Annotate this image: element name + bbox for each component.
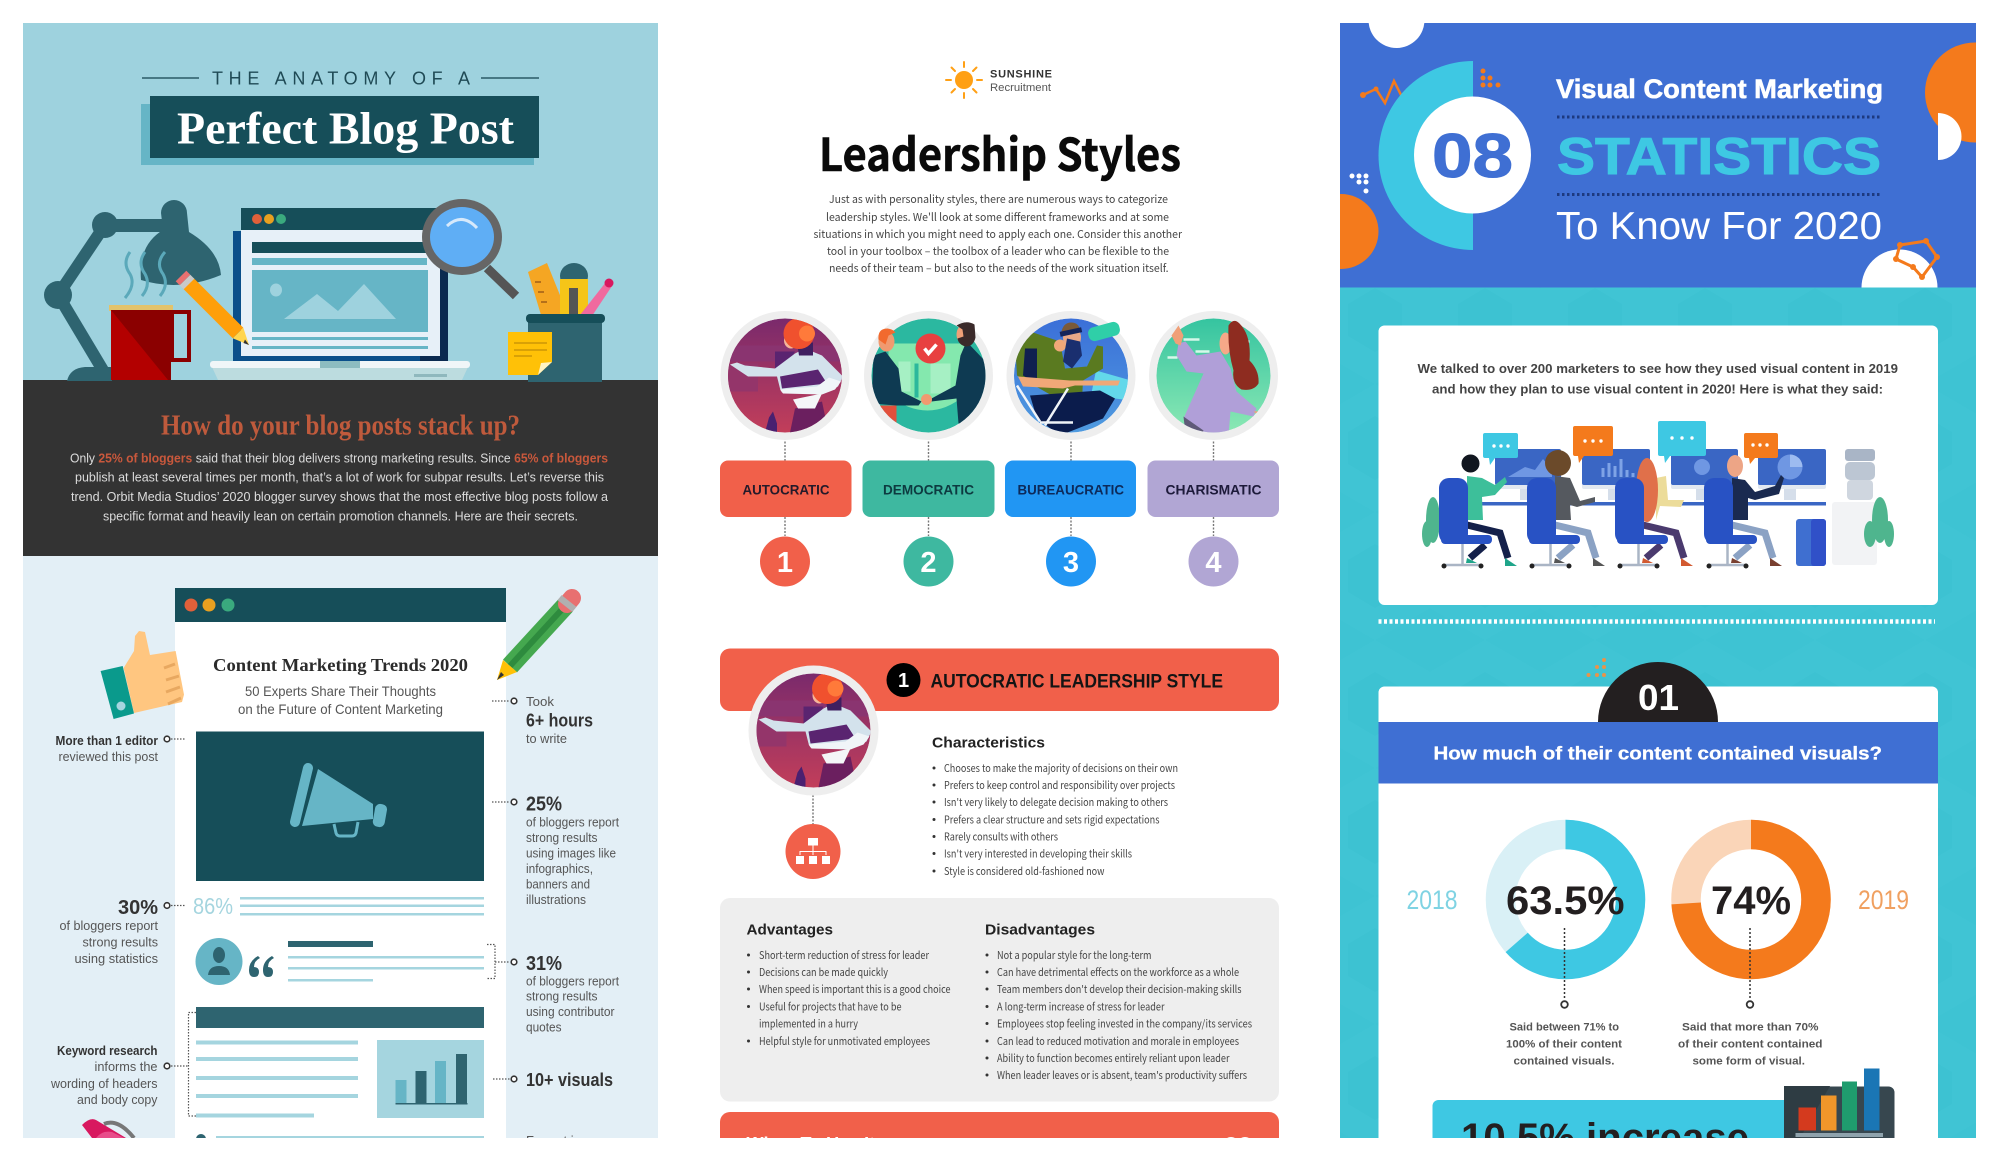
text block: advantages: implemented in a hurry [759, 1016, 858, 1032]
caption: 2019: of their content contained [1678, 1038, 1822, 1050]
badge: number 08 [1378, 61, 1531, 250]
number badge 1: 1 [777, 547, 793, 579]
caption: 2018: contained visuals. [1514, 1056, 1614, 1068]
text block: characteristics: Style is considered old-fashioned now [944, 864, 1105, 879]
callout: more than 1 editor: reviewed this post [58, 749, 158, 764]
icon: bar chart on screen [1784, 1068, 1894, 1156]
text block: disadvantages: Not a popular style for the long-term [997, 948, 1152, 963]
caption: 2018: Said between 71% to [1510, 1022, 1619, 1034]
style column 1: autocratic [720, 311, 852, 586]
callout: 31% quotes: of bloggers report [526, 974, 619, 988]
callout: keyword research: informs the [94, 1059, 158, 1074]
water cooler [1832, 449, 1877, 565]
text block: disadvantages: Employees stop feeling invested in the company/its services [997, 1016, 1252, 1032]
style column 2: democratic [862, 311, 994, 586]
icon: magnifying glass [422, 199, 516, 296]
panel: Leadership Styles infographic [720, 61, 1279, 1138]
style column 3: bureaucratic [1005, 311, 1136, 586]
plant right [1864, 497, 1894, 547]
illustration: seated man [1006, 311, 1136, 440]
section header: Autocratic Leadership Style [720, 648, 1279, 711]
document title: Content Marketing Trends 2020 [213, 655, 468, 675]
label: democratic [862, 460, 994, 517]
text block: disadvantages: Ability to function becomes entirely reliant upon leader [997, 1051, 1230, 1066]
donut chart: 2019 74%: 74% [1711, 879, 1791, 923]
intro paragraph [70, 450, 609, 524]
illustration: autocratic leader [720, 311, 850, 440]
panel: Visual Content Marketing infographic [1304, 0, 1999, 1162]
intro paragraph: leadership styles. We'll look at some different frameworks and at some [826, 209, 1169, 225]
panel: advantages and disadvantages [720, 898, 1279, 1102]
caption: 2018: 100% of their content [1506, 1038, 1622, 1050]
callout: 30% statistics: 30% [118, 897, 158, 919]
bar chart visual [377, 1040, 484, 1118]
section header: Autocratic Leadership Style: 1 [898, 670, 909, 692]
illustration: office team at computers [1422, 421, 1894, 568]
desk [1482, 502, 1826, 506]
next section stub [196, 1134, 484, 1138]
icon: orange pencil [181, 276, 249, 345]
title banner: Perfect Blog Post: Perfect Blog Post [177, 102, 515, 154]
text block: disadvantages [985, 922, 1252, 1083]
intro text: We talked to over 200 marketers to see how they used visual content in 2019 [1418, 362, 1898, 376]
question band: How much of their content contained visuals? [1434, 742, 1882, 764]
intro text [1418, 362, 1898, 396]
callout: 6+ hours: to write [526, 731, 567, 746]
document subtitle: on the Future of Content Marketing [238, 701, 443, 717]
donut chart: 2019 74% [1686, 834, 1909, 964]
title: To Know For 2020: To Know For 2020 [1556, 205, 1882, 248]
person 2 [1527, 450, 1605, 568]
text block: characteristics: Prefers to keep control and responsibility over projects [944, 778, 1175, 793]
text block: advantages: Short-term reduction of stress for leader [759, 948, 930, 963]
callout: 25% images [492, 794, 619, 907]
section header: Autocratic Leadership Style: AUTOCRATIC LEADERSHIP STYLE [930, 672, 1223, 692]
label: autocratic: AUTOCRATIC [742, 482, 830, 498]
intro paragraph: Just as with personality styles, there are numerous ways to categorize [829, 191, 1168, 207]
text block: disadvantages: A long-term increase of stress for leader [997, 1000, 1165, 1014]
text block: advantages [746, 922, 951, 1049]
hero image with megaphone icon [196, 732, 484, 881]
monitors [1495, 449, 1826, 500]
person 4 [1704, 455, 1784, 568]
callout: 10.5% increase [1432, 1100, 1832, 1160]
panel: intro card [1378, 326, 1938, 605]
document subtitle: 50 Experts Share Their Thoughts [245, 683, 436, 699]
icon: pink magnet stub [82, 1119, 134, 1138]
icon: pen cup [508, 263, 614, 382]
text block: characteristics: Rarely consults with others [944, 830, 1058, 844]
callout: more than 1 editor: More than 1 editor [56, 733, 158, 748]
title: The Anatomy of a: THE ANATOMY OF A [212, 68, 470, 88]
icon: green pencil [497, 598, 572, 680]
icon: red mug [109, 305, 189, 380]
caption: 2019: some form of visual. [1692, 1056, 1805, 1068]
text block: advantages: Decisions can be made quickly [759, 965, 888, 980]
icon: laptop with blog window [210, 208, 470, 380]
label: charismatic: CHARISMATIC [1166, 482, 1262, 498]
callout: 31% quotes: quotes [526, 1020, 562, 1034]
intro paragraph: situations in which you might need to apply each one. Consider this another [814, 226, 1183, 242]
text block: characteristics: Isn't very likely to delegate decision making to others [944, 795, 1168, 810]
text block: disadvantages: Can have detrimental effects on the workforce as a whole [997, 965, 1239, 980]
callout: 25% images: using images like [526, 846, 616, 860]
style column 4: charismatic [1148, 311, 1279, 586]
callout: 25% images: illustrations [526, 893, 586, 907]
callout: 25% images: 25% [526, 794, 562, 816]
text block: advantages: When speed is important this is a good choice [759, 982, 951, 997]
callout: 6+ hours: Took [526, 694, 555, 709]
person 3 [1615, 458, 1693, 568]
text block: characteristics [932, 734, 1178, 879]
callout: 6+ hours [492, 696, 592, 743]
callout: keyword research: Keyword research [57, 1043, 158, 1058]
illustration: charismatic woman [1149, 311, 1278, 440]
callout: 30% statistics: strong results [82, 934, 158, 950]
callout: format clipped: Format is an [526, 1133, 598, 1148]
section header bar and text lines [196, 1007, 484, 1118]
decorative header shapes [1304, 0, 1999, 288]
number badge 4 [1188, 536, 1238, 586]
connector lines [785, 438, 1214, 536]
callout: 25% images: banners and [526, 878, 590, 892]
label: democratic: DEMOCRATIC [883, 482, 974, 498]
small dots [1586, 658, 1606, 677]
number badge 3: 3 [1063, 547, 1079, 579]
text block: characteristics: Chooses to make the majority of decisions on their own [944, 761, 1178, 776]
panel: Perfect Blog Post infographic [23, 23, 658, 1148]
callout: 31% quotes: 31% [526, 953, 562, 975]
callout: 25% images: of bloggers report [526, 816, 619, 830]
badge: 01: 01 [1638, 677, 1679, 718]
person 1 [1439, 454, 1517, 568]
question band [1378, 722, 1938, 784]
illustration: autocratic leader with connector [748, 666, 878, 825]
dotted divider [1378, 619, 1935, 624]
callout: 25% images: strong results [526, 831, 598, 845]
number badge 2 [904, 536, 954, 586]
callout: 31% quotes: strong results [526, 990, 598, 1004]
icon: desk lamp [44, 200, 221, 381]
text block: disadvantages: Disadvantages [985, 922, 1095, 938]
heading: How do your blog posts stack up: How do your blog posts stack up? [161, 410, 520, 442]
callout: 10+ visuals [493, 1072, 612, 1086]
callout: 10.5% increase: 10.5% increase [1461, 1116, 1749, 1160]
number badge 1 [760, 536, 810, 586]
section bar: when to use it: When To Use It [746, 1134, 875, 1154]
text block: characteristics: Prefers a clear structure and sets rigid expectations [944, 812, 1160, 828]
logo: Sunshine Recruitment: SUNSHINE [990, 68, 1052, 80]
text block: advantages: Helpful style for unmotivated employees [759, 1034, 930, 1049]
cabinet [1796, 519, 1826, 566]
plant left [1422, 497, 1440, 547]
callout: 10+ visuals: 10+ visuals [526, 1070, 613, 1090]
intro paragraph: trend. Orbit Media Studios’ 2020 blogger survey shows that the most effective blog posts follow a [71, 489, 609, 504]
text block: characteristics: Isn't very interested in developing their skills [944, 846, 1132, 862]
donut chart: 2018 63.5%: 2018 [1406, 885, 1458, 915]
intro paragraph: publish at least several times per month, that’s a lot of work for subpar results. Let’s reverse this [75, 470, 604, 484]
title: Visual Content Marketing: Visual Content Marketing [1556, 74, 1883, 104]
intro paragraph: needs of their team – but also to the needs of the work situation itself. [829, 260, 1168, 276]
statistic placeholder 86%: 86% [193, 893, 233, 919]
intro paragraph [814, 191, 1183, 276]
callout: 30% statistics [60, 897, 186, 966]
panel: blog post document mockup [175, 588, 506, 1148]
callout: keyword research: and body copy [77, 1092, 158, 1107]
callout: more than 1 editor [56, 733, 186, 764]
text block: disadvantages: When leader leaves or is absent, team's productivity suffers [997, 1068, 1247, 1083]
callout: 30% statistics: using statistics [74, 951, 158, 966]
intro text: and how they plan to use visual content in 2020! Here is what they said: [1432, 382, 1883, 396]
badge: 01 [1598, 662, 1718, 722]
label: bureaucratic: BUREAUCRATIC [1018, 482, 1124, 498]
text block: disadvantages: Can lead to reduced motivation and morale in employees [997, 1034, 1239, 1049]
intro paragraph: specific format and heavily lean on certain promotion channels. Here are their secrets. [103, 508, 578, 524]
intro paragraph: tool in your toolbox – the toolbox of a leader who can be flexible to the [827, 243, 1169, 259]
callout: 6+ hours: 6+ hours [526, 710, 593, 730]
label: bureaucratic [1005, 460, 1136, 517]
illustration: handshake [864, 311, 993, 440]
section bar: when to use it [720, 1112, 1279, 1154]
callout: 31% quotes: using contributor [526, 1005, 614, 1019]
label: charismatic [1148, 460, 1279, 517]
callout: keyword research [50, 1012, 196, 1116]
title: Leadership Styles: Leadership Styles [819, 119, 1181, 184]
icon: coffee steam [125, 252, 165, 298]
title banner: Perfect Blog Post [141, 96, 539, 165]
donut chart: 2018 63.5%: 63.5% [1506, 879, 1624, 923]
logo: Sunshine Recruitment: Recruitment [990, 82, 1051, 94]
number badge 4: 4 [1205, 547, 1222, 579]
callout: keyword research: wording of headers [50, 1076, 158, 1091]
document subtitle [238, 683, 443, 717]
text block: disadvantages: Team members don't develop their decision-making skills [997, 982, 1242, 997]
caption: 2019: Said that more than 70% [1682, 1022, 1819, 1034]
label: autocratic [720, 460, 852, 517]
text block: advantages: Advantages [746, 922, 833, 938]
icon: org chart [786, 824, 840, 879]
number badge 3 [1046, 536, 1096, 586]
icon: thumbs up [101, 631, 184, 719]
donut chart: 2018 63.5% [1406, 834, 1630, 964]
callout: 31% quotes [487, 944, 619, 1034]
monitor contents [1508, 454, 1802, 480]
intro paragraph: Only 25% of bloggers said that their blog delivers strong marketing results. Since 65% of bloggers [70, 450, 608, 466]
logo: Sunshine Recruitment [946, 62, 1052, 98]
number badge 2: 2 [920, 547, 937, 579]
callout: 30% statistics: of bloggers report [60, 918, 158, 933]
badge: number 08: 08 [1432, 122, 1513, 191]
panel: question 01 card [1378, 658, 1938, 1162]
text block: advantages: Useful for projects that have to be [759, 1000, 902, 1014]
contributor quote block [196, 938, 484, 985]
speech bubbles [1483, 421, 1778, 465]
title: Statistics: STATISTICS [1557, 128, 1881, 186]
caption: 2019 [1678, 928, 1822, 1068]
text block: characteristics: Characteristics [932, 734, 1045, 752]
caption: 2018 [1506, 928, 1622, 1068]
donut chart: 2019 74%: 2019 [1858, 885, 1909, 915]
callout: 25% images: infographics, [526, 862, 593, 876]
